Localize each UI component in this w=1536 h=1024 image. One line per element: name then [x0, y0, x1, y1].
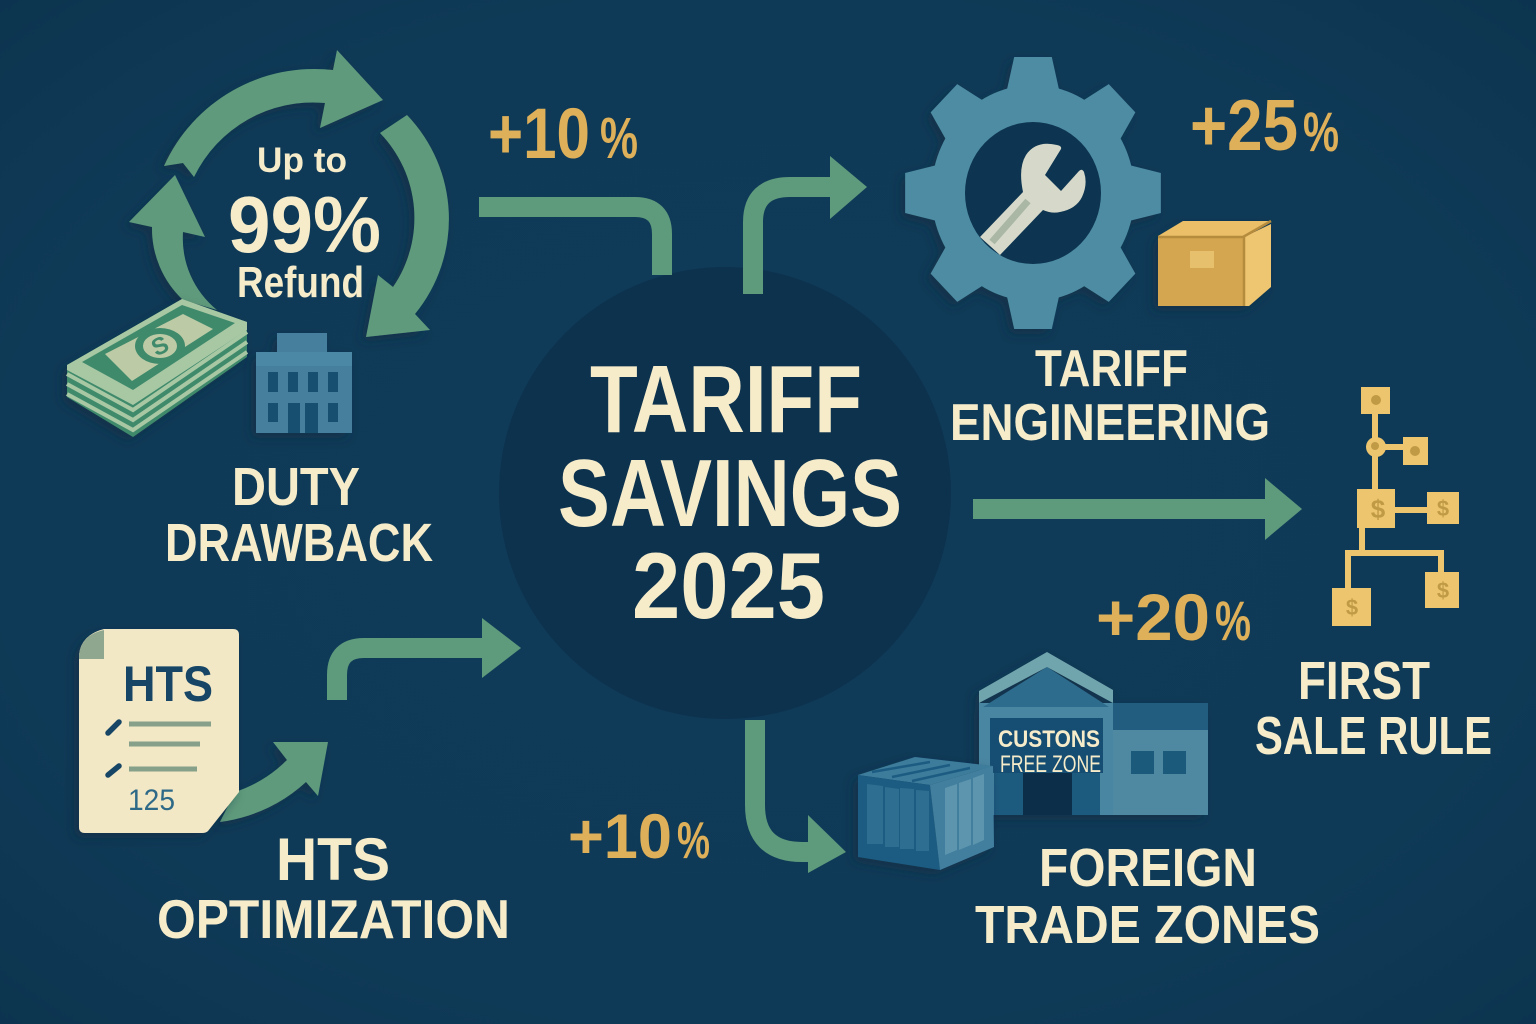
icon: circular refund arrows: [129, 50, 449, 337]
icon: stack of cash: S: [147, 331, 173, 362]
label: foreign trade zones: FOREIGN: [1039, 838, 1257, 898]
label: hts optimization: [157, 826, 510, 950]
percentage: +10% bottom: %: [677, 812, 710, 870]
arrow: small curved arrow from document: [220, 742, 328, 822]
gear hole: [965, 122, 1101, 264]
icon: hts document: 125: [128, 784, 175, 817]
panel: hts optimization: [79, 629, 510, 950]
central circle: [499, 267, 951, 719]
panel: duty drawback: [67, 50, 449, 573]
panel: foreign trade zones: [858, 652, 1320, 955]
warehouse sign: [998, 726, 1101, 778]
label: hts optimization: OPTIMIZATION: [157, 888, 510, 950]
icon: decision tree: $: [1346, 595, 1358, 620]
warehouse sign: FREE ZONE: [1000, 751, 1101, 778]
panel: tariff engineering: [905, 57, 1271, 452]
percentage: +20%: +20: [1096, 580, 1210, 654]
label: duty drawback: [165, 457, 433, 573]
label: first sale rule: [1255, 651, 1492, 766]
percentage: +25%: +25: [1190, 86, 1298, 166]
refund text: Up to: [257, 141, 347, 180]
icon: wrench: [980, 144, 1086, 255]
arrow: duty drawback to centre: [479, 207, 662, 275]
label: duty drawback: DRAWBACK: [165, 513, 433, 573]
arrow: centre to foreign trade zones: [755, 720, 846, 873]
label: foreign trade zones: TRADE ZONES: [975, 895, 1320, 955]
icon: customs building: [256, 333, 352, 433]
warehouse sign: CUSTONS: [998, 726, 1100, 753]
icon: shipping container: [858, 757, 994, 870]
icon: stack of cash: [67, 299, 247, 437]
icon: decision tree: $: [1371, 494, 1386, 524]
percentage: +10% top: +10: [488, 95, 590, 174]
label: duty drawback: DUTY: [232, 457, 360, 517]
icon: warehouse: [979, 652, 1208, 815]
percentage: +10% bottom: +10: [568, 802, 672, 872]
icon: hts document: HTS: [123, 656, 213, 712]
label: tariff engineering: [950, 340, 1270, 452]
refund text: [228, 141, 381, 307]
refund text: 99%: [228, 180, 381, 269]
title: TARIFF: [590, 346, 862, 453]
icon: decision tree: $: [1437, 496, 1449, 521]
arrow: centre to tariff engineering: [753, 156, 867, 294]
arrow: centre to first sale rule: [973, 478, 1302, 540]
icon: decision tree: $: [1437, 578, 1449, 603]
refund text: Refund: [237, 258, 364, 307]
percentage: +10% top: %: [600, 106, 638, 171]
icon: decision tree: [1332, 387, 1459, 626]
label: foreign trade zones: [975, 838, 1320, 955]
arrow: hts to centre: [337, 618, 521, 700]
title: SAVINGS: [558, 440, 902, 547]
icon: box: [1158, 221, 1271, 306]
label: tariff engineering: ENGINEERING: [950, 394, 1270, 452]
label: first sale rule: FIRST: [1298, 651, 1430, 711]
icon: gear: [905, 57, 1161, 329]
title: 2025: [632, 533, 825, 638]
label: hts optimization: HTS: [276, 826, 390, 893]
title: [558, 346, 902, 638]
percentage: +25%: %: [1303, 100, 1339, 163]
panel: first sale rule: [1255, 387, 1492, 766]
percentage: +20%: %: [1215, 589, 1251, 652]
icon: hts document: [79, 629, 239, 833]
label: tariff engineering: TARIFF: [1035, 340, 1188, 398]
